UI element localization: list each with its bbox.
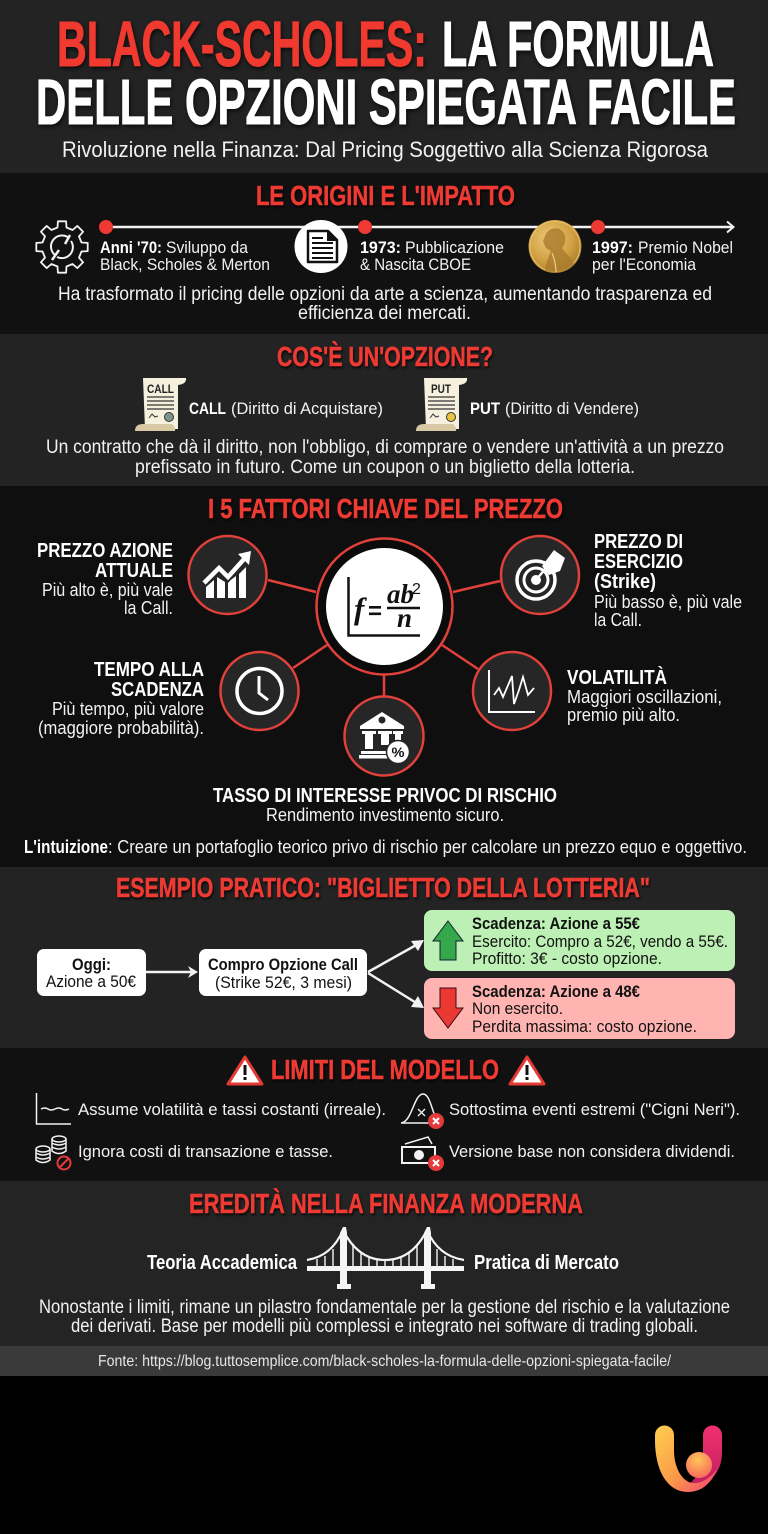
header: title and subtitle [36, 8, 736, 162]
factor: prezzo di esercizio: PREZZO DI [594, 531, 683, 553]
heading: fattori: I 5 FATTORI CHIAVE DEL PREZZO [208, 493, 563, 524]
icon: bridge [307, 1227, 464, 1289]
timeline text 1: Anni '70: [100, 238, 162, 257]
box: oggi [37, 949, 146, 996]
arrow: oggi to call [146, 966, 198, 978]
panel: eredità [39, 1188, 730, 1337]
icon: bank with percent: % [392, 744, 405, 760]
timeline text 1: Sviluppo da [166, 238, 249, 257]
factor: tempo alla scadenza: SCADENZA [111, 679, 204, 701]
timeline dots [99, 220, 605, 234]
box: scenario loss: Non esercito. [472, 999, 563, 1018]
factor: prezzo di esercizio: la Call. [594, 610, 642, 630]
central formula: 2 [412, 581, 421, 598]
panel: i 5 fattori chiave [24, 493, 747, 857]
factor: prezzo di esercizio [594, 531, 742, 630]
heading: origini: LE ORIGINI E L'IMPATTO [256, 180, 515, 211]
arrow: to loss [368, 973, 424, 1008]
heading: eredità: EREDITÀ NELLA FINANZA MODERNA [189, 1188, 583, 1219]
limit text 4: Versione base non considera dividendi. [449, 1142, 735, 1161]
factor: prezzo azione: la Call. [124, 598, 173, 618]
panel: esempio pratico [37, 872, 735, 1039]
footer: source [0, 1346, 768, 1376]
timeline text 3 [592, 238, 733, 274]
legacy paragraph [39, 1297, 730, 1337]
icon: warning left [228, 1057, 262, 1084]
timeline text 1 [100, 238, 270, 274]
footer: source: Fonte: https://blog.tuttosemplice.com/black-scholes-la-formula-delle-opzioni-spiegata-facile/ [98, 1353, 671, 1370]
icon: stock chart [188, 536, 266, 614]
connector lines [268, 580, 500, 697]
option definition paragraph: Un contratto che dà il diritto, non l'obbligo, di comprare o vendere un'attività a un prezzo [46, 437, 724, 458]
central formula: f [354, 591, 367, 626]
icon: put contract [416, 378, 467, 431]
icon: call contract: CALL [147, 382, 174, 396]
panel: limiti del modello [36, 1054, 740, 1171]
timeline text 3: Premio Nobel [638, 238, 733, 257]
factor: tasso di interesse [213, 785, 557, 825]
box: scenario profit: Profitto: 3€ - costo opzione. [472, 949, 662, 968]
box: scenario profit [424, 910, 735, 971]
impact paragraph [58, 284, 712, 324]
impact paragraph: efficienza dei mercati. [298, 303, 471, 324]
option definition paragraph [46, 437, 724, 478]
factor: volatilità: Maggiori oscillazioni, [567, 687, 722, 707]
panel: le origini e l'impatto [36, 180, 734, 324]
icon: up arrow [433, 921, 463, 960]
icon: call contract [135, 378, 186, 431]
timeline text 2: & Nascita CBOE [360, 255, 471, 274]
factor: tasso di interesse: Rendimento investimento sicuro. [266, 805, 504, 825]
central formula: ab [387, 579, 414, 609]
box: scenario loss [424, 978, 735, 1039]
central formula: n [397, 603, 412, 633]
icon: put contract: PUT [431, 382, 452, 396]
icon: bank with percent [344, 696, 424, 776]
box: scenario profit: Esercito: Compro a 52€, vendo a 55€. [472, 932, 728, 951]
heading: limiti: LIMITI DEL MODELLO [271, 1054, 499, 1085]
factor: tempo alla scadenza: (maggiore probabilità). [38, 718, 204, 738]
factor: volatilità [567, 666, 722, 725]
label: pratica: Pratica di Mercato [474, 1252, 619, 1274]
heading: opzione: COS'È UN'OPZIONE? [277, 341, 493, 372]
icon: document [294, 220, 348, 273]
limit text 1: Assume volatilità e tassi costanti (irreale). [78, 1100, 386, 1119]
title line 1: BLACK-SCHOLES: [57, 8, 427, 80]
factor: prezzo di esercizio: (Strike) [594, 571, 656, 593]
legacy paragraph: dei derivati. Base per modelli più complessi e integrato nei software di trading globali. [71, 1316, 698, 1337]
icon: nobel medal [528, 220, 582, 273]
icon: down arrow [433, 988, 463, 1028]
timeline text 1: Black, Scholes & Merton [100, 255, 270, 274]
central formula [316, 538, 452, 674]
impact paragraph: Ha trasformato il pricing delle opzioni da arte a scienza, aumentando trasparenza ed [58, 284, 712, 305]
factor: prezzo di esercizio: Più basso è, più vale [594, 592, 742, 612]
factor: volatilità: premio più alto. [567, 705, 680, 725]
factor: tempo alla scadenza: Più tempo, più valore [52, 699, 204, 719]
box: oggi: Oggi: [72, 955, 111, 974]
icon: banknotes with x [402, 1137, 444, 1171]
factor: prezzo di esercizio: ESERCIZIO [594, 551, 683, 573]
timeline text 3: 1997: [592, 238, 633, 257]
box: compro opzione: (Strike 52€, 3 mesi) [215, 973, 352, 992]
timeline text 2: Pubblicazione [405, 238, 504, 257]
icon: bell curve with x [401, 1094, 444, 1129]
box: scenario loss: Scadenza: Azione a 48€ [472, 982, 640, 1001]
factor: prezzo azione: PREZZO AZIONE [37, 540, 173, 562]
icon: target with price tag [501, 536, 579, 614]
timeline arrow [107, 222, 734, 232]
factor: volatilità: VOLATILITÀ [567, 666, 667, 689]
timeline text 2 [360, 238, 504, 274]
intuition note: L'intuizione [24, 837, 108, 857]
factor: prezzo azione [37, 540, 173, 618]
factor: tasso di interesse: TASSO DI INTERESSE PRIVOC DI RISCHIO [213, 785, 557, 807]
subtitle: Rivoluzione nella Finanza: Dal Pricing Soggettivo alla Scienza Rigorosa [62, 137, 709, 162]
box: scenario profit: Scadenza: Azione a 55€ [472, 914, 640, 933]
arrow: to profit [368, 940, 424, 972]
box: oggi: Azione a 50€ [46, 972, 136, 991]
icon: volatility chart [473, 652, 551, 730]
label: teoria: Teoria Accademica [147, 1252, 298, 1274]
box: scenario loss: Perdita massima: costo opzione. [472, 1017, 697, 1036]
icon: coins with prohibition [36, 1136, 70, 1170]
limit text 3: Ignora costi di transazione e tasse. [78, 1142, 333, 1161]
timeline text 2: 1973: [360, 238, 401, 257]
panel: cos'è un'opzione [46, 341, 724, 478]
put label: (Diritto di Vendere) [505, 399, 639, 418]
icon: flat line chart [36, 1093, 71, 1124]
icon: clock [220, 652, 298, 730]
limit text 2: Sottostima eventi estremi ("Cigni Neri"). [449, 1100, 740, 1119]
timeline text 3: per l'Economia [592, 255, 696, 274]
box: compro opzione [199, 949, 367, 996]
icon: gear [36, 221, 88, 273]
call label: (Diritto di Acquistare) [231, 399, 383, 418]
factor: prezzo azione: ATTUALE [95, 560, 173, 582]
factor: prezzo azione: Più alto è, più vale [42, 580, 173, 600]
put label: PUT [470, 399, 501, 418]
option definition paragraph: prefissato in futuro. Come un coupon o un biglietto della lotteria. [135, 457, 635, 478]
call label: CALL [189, 399, 226, 418]
factor: tempo alla scadenza [38, 659, 204, 738]
factor: tempo alla scadenza: TEMPO ALLA [94, 659, 204, 681]
logo [655, 1426, 722, 1492]
icon: warning right [510, 1057, 544, 1084]
box: compro opzione: Compro Opzione Call [208, 955, 358, 974]
central formula: = [368, 598, 382, 625]
